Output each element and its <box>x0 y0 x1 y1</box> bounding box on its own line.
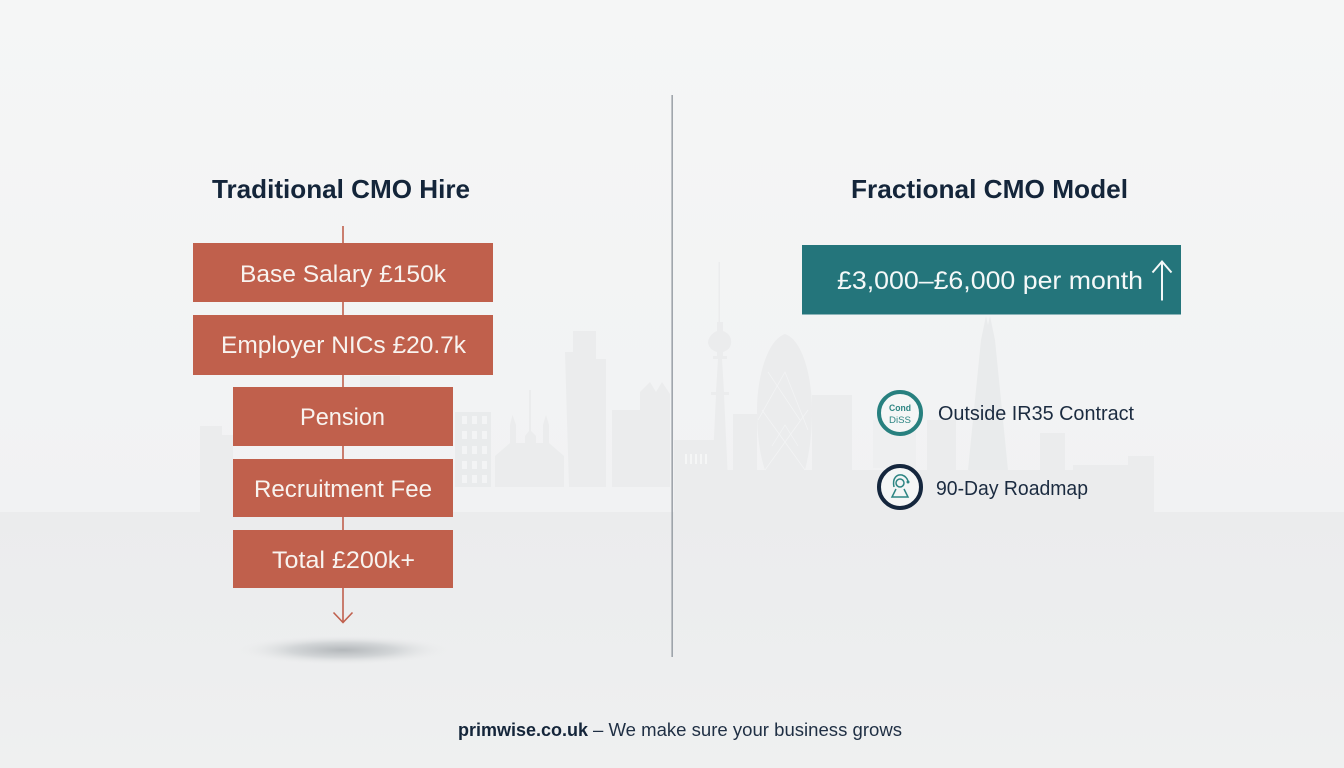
cost box: total <box>233 530 453 588</box>
cost box: pension: Pension <box>300 404 385 431</box>
connector line with down arrow <box>334 226 352 622</box>
footer <box>458 720 902 740</box>
cost box: base salary: Base Salary £150k <box>240 261 447 288</box>
price banner <box>802 245 1181 314</box>
icon: contract badge <box>879 392 921 434</box>
panel: traditional cost stack <box>193 243 493 588</box>
background floor <box>0 512 1344 768</box>
icon: up arrow <box>1152 262 1172 300</box>
skyline: left city silhouette <box>200 331 670 512</box>
cost box: pension <box>233 387 453 446</box>
feature: Outside IR35 Contract: Outside IR35 Contract <box>938 403 1134 425</box>
footer: primwise.co.uk <box>458 720 589 740</box>
cost box: recruitment fee: Recruitment Fee <box>254 476 432 503</box>
ground shadow <box>237 635 449 665</box>
divider <box>672 95 673 657</box>
icon: roadmap badge <box>879 466 921 508</box>
skyline: right city silhouette <box>674 262 1154 512</box>
footer: – We make sure your business grows <box>593 720 902 740</box>
price banner: £3,000–£6,000 per month <box>837 267 1143 295</box>
heading: Traditional CMO Hire: Traditional CMO Hire <box>212 174 470 204</box>
feature: 90-Day Roadmap <box>879 466 1088 508</box>
cost box: base salary <box>193 243 493 302</box>
cost box: total: Total £200k+ <box>272 547 415 574</box>
icon: contract badge: Cond <box>889 403 911 413</box>
background sky <box>0 0 1344 512</box>
cost box: recruitment fee <box>233 459 453 517</box>
icon: contract badge: DiSS <box>889 415 911 425</box>
feature: 90-Day Roadmap: 90-Day Roadmap <box>936 478 1088 500</box>
cost box: employer NICs <box>193 315 493 375</box>
cost box: employer NICs: Employer NICs £20.7k <box>221 332 467 359</box>
heading: Fractional CMO Model: Fractional CMO Model <box>851 174 1128 204</box>
feature: Outside IR35 Contract <box>879 392 1134 434</box>
